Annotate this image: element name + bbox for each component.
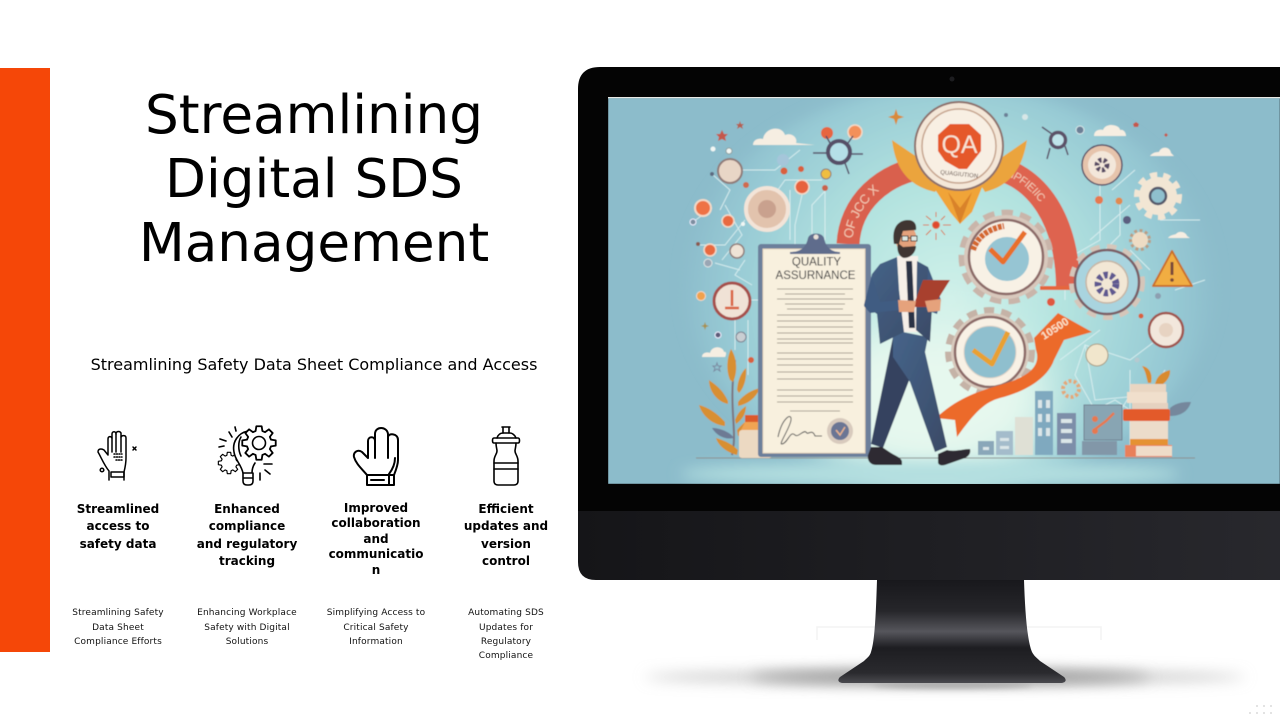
right gear badges bbox=[1004, 113, 1183, 397]
orange ribbon: 10500 bbox=[1039, 316, 1071, 343]
column 4 description: Regulatory bbox=[481, 637, 531, 647]
shoes bbox=[868, 447, 970, 465]
title: Digital SDS bbox=[165, 148, 463, 210]
upper check gear bbox=[963, 214, 1049, 300]
clipboard document bbox=[758, 234, 871, 457]
glasses bbox=[902, 236, 917, 241]
stack of books bbox=[1123, 366, 1191, 457]
shirt bbox=[897, 256, 920, 332]
clipboard document: ASSURNANCE bbox=[776, 270, 856, 282]
accent bar bbox=[0, 68, 50, 652]
title: Streamlining bbox=[145, 84, 483, 146]
jar bbox=[739, 415, 772, 458]
icon: lightbulb with gears bbox=[218, 425, 277, 486]
ground line bbox=[696, 457, 1195, 459]
circuit lines bbox=[693, 150, 1205, 450]
column 2 heading: tracking bbox=[219, 554, 275, 568]
subtitle: Streamlining Safety Data Sheet Compliance and Access bbox=[91, 355, 537, 374]
title bbox=[139, 84, 489, 274]
sparkle bbox=[923, 212, 951, 240]
column 1 description: Streamlining Safety bbox=[72, 608, 164, 618]
column 2 description: Safety with Digital bbox=[204, 623, 290, 633]
column 2 description: Solutions bbox=[226, 637, 268, 647]
QA badge: QUAGIUTION bbox=[940, 170, 978, 180]
column 1 heading bbox=[77, 502, 159, 551]
column 4 heading: version bbox=[481, 537, 531, 551]
column 2 description bbox=[197, 608, 297, 647]
column 3 heading: n bbox=[372, 562, 380, 576]
column 2 heading: and regulatory bbox=[197, 537, 297, 551]
column 4 description: Compliance bbox=[479, 651, 533, 661]
icon: water bottle bbox=[492, 426, 520, 486]
column 1 description: Compliance Efforts bbox=[74, 637, 162, 647]
arm bbox=[864, 267, 941, 314]
clouds bbox=[702, 125, 1190, 357]
column 3 description bbox=[327, 608, 425, 647]
column 3 description: Information bbox=[349, 637, 403, 647]
businessman bbox=[864, 220, 970, 465]
warning sign bbox=[1153, 251, 1192, 286]
column 3 description: Critical Safety bbox=[343, 623, 409, 633]
column 4 heading bbox=[464, 502, 548, 568]
column 1 description: Data Sheet bbox=[92, 623, 144, 633]
column 3 heading: Improved bbox=[344, 500, 408, 514]
orange ribbon bbox=[936, 313, 1092, 437]
column 4 heading: Efficient bbox=[478, 502, 534, 516]
right blue gear bbox=[1073, 248, 1141, 316]
column 3 heading: communicatio bbox=[329, 547, 423, 561]
column 1 heading: Streamlined bbox=[77, 502, 159, 516]
red arch: OF JCC X bbox=[844, 184, 880, 238]
column 4 description bbox=[468, 608, 544, 661]
tie bbox=[906, 261, 915, 328]
column 4 heading: control bbox=[482, 554, 530, 568]
leaf plant bbox=[699, 349, 760, 455]
watermark dots bbox=[1249, 705, 1272, 714]
column 2 heading: Enhanced bbox=[214, 502, 280, 516]
column 1 description bbox=[72, 608, 164, 647]
back leg bbox=[870, 337, 910, 448]
red arch bbox=[836, 162, 1080, 291]
QA badge: QA bbox=[941, 131, 978, 159]
jacket bbox=[864, 257, 932, 344]
column 1 heading: safety data bbox=[80, 537, 156, 551]
hair and beard bbox=[893, 220, 916, 258]
front leg bbox=[893, 330, 947, 452]
left nodes and dials bbox=[690, 109, 904, 371]
QA badge bbox=[892, 102, 1027, 224]
skyline bbox=[978, 391, 1122, 455]
red arch: OGNPFIEIIC bbox=[1010, 172, 1046, 202]
head bbox=[896, 229, 917, 248]
monitor body bbox=[578, 67, 1280, 580]
background glow bbox=[680, 85, 1215, 486]
desk shadow bbox=[645, 627, 1245, 688]
column 2 heading: compliance bbox=[209, 519, 285, 533]
hands bbox=[898, 299, 941, 312]
column 3 description: Simplifying Access to bbox=[327, 608, 425, 618]
monitor mockup bbox=[578, 67, 1280, 714]
clipboard document: QUALITY bbox=[792, 256, 841, 268]
column 2 heading bbox=[197, 502, 298, 568]
column 3 heading: and bbox=[363, 532, 389, 546]
column 4 description: Automating SDS bbox=[468, 608, 544, 618]
column 3 heading: collaboration bbox=[331, 516, 421, 530]
screen illustration bbox=[608, 98, 1280, 484]
lower check gear bbox=[949, 311, 1031, 393]
column 4 heading: updates and bbox=[464, 519, 548, 533]
column 3 heading bbox=[329, 500, 423, 576]
icon: work glove bbox=[352, 427, 399, 486]
icon: glove with dotted palm bbox=[97, 430, 137, 481]
column 1 heading: access to bbox=[87, 519, 149, 533]
column 2 description: Enhancing Workplace bbox=[197, 608, 297, 618]
monitor stand bbox=[838, 580, 1066, 683]
title: Management bbox=[139, 212, 489, 274]
column 4 description: Updates for bbox=[479, 623, 533, 633]
tablet bbox=[913, 280, 950, 307]
